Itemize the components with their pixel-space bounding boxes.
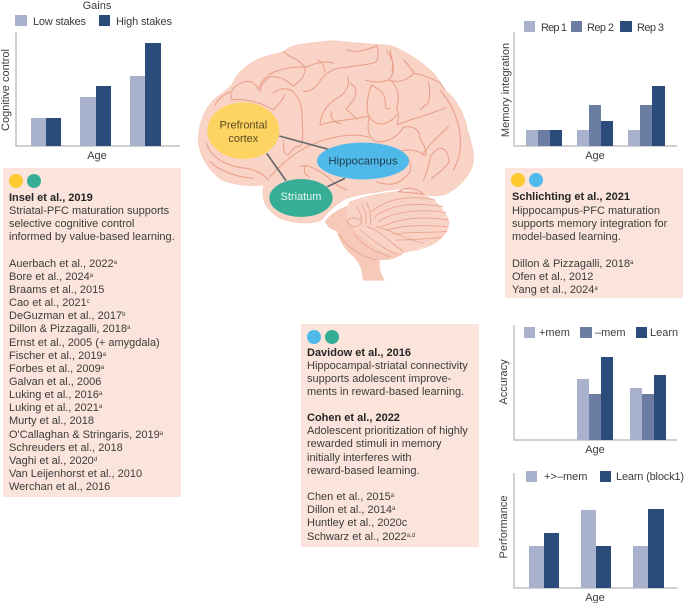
legend: performance: Learn (block1) (616, 471, 684, 483)
legend: repetitions: Rep 1 (541, 22, 567, 34)
chart: accuracy by age: Age (585, 444, 605, 456)
panel: Davidow and Cohen: initially interferes with (307, 452, 412, 464)
panel: Insel et al.: Braams et al., 2015 (9, 284, 104, 296)
region: hippocampus: Hippocampus (328, 155, 398, 167)
panel: Insel et al.: d (94, 457, 97, 463)
panel: Schlichting et al.: Yang et al., 2024 (512, 284, 594, 296)
bars: memory integration (526, 86, 665, 146)
brain illustration (198, 41, 473, 281)
panel: Insel et al.: a (99, 391, 103, 397)
panel: Schlichting et al.: Ofen et al., 2012 (512, 271, 593, 283)
panel: Schlichting et al. (505, 168, 683, 298)
panel: Insel et al.: Vaghi et al., 2020 (9, 455, 94, 467)
connection lines (267, 136, 345, 187)
panel: Davidow and Cohen: Huntley et al., 2020c (307, 517, 408, 529)
panel: Schlichting et al.: Hippocampus-PFC maturation (512, 205, 660, 217)
panel: Insel et al.: Galvan et al., 2006 (9, 376, 101, 388)
panel: Insel et al.: DeGuzman et al., 2017 (9, 310, 122, 322)
panel: Insel et al.: Cao et al., 2021 (9, 297, 87, 309)
panel: Insel et al.: Dillon & Pizzagalli, 2018 (9, 323, 127, 335)
panel: Insel et al.: Fischer et al., 2019 (9, 350, 103, 362)
brainstem and cerebellum (325, 191, 449, 281)
cerebrum (198, 41, 473, 223)
legend: repetitions (524, 21, 664, 34)
region: prefrontal cortex: cortex (228, 133, 259, 145)
panel: Insel et al.: a (127, 325, 131, 331)
bars: cognitive control (31, 43, 161, 146)
panel: Insel et al.: c (87, 299, 90, 305)
bars: accuracy (577, 357, 666, 440)
panel: Schlichting et al.: a (594, 286, 598, 292)
legend: performance: +>–mem (544, 471, 587, 483)
chart: performance by age (498, 471, 684, 603)
panel: Insel et al.: b (122, 312, 126, 318)
chart: cognitive control by age (0, 0, 180, 162)
panel: Insel et al.: a (103, 352, 107, 358)
legend: gains stakes: High stakes (116, 16, 172, 28)
chart: memory integration by age: Memory integration (500, 43, 512, 137)
panel: Davidow and Cohen (301, 324, 479, 547)
chart: accuracy by age (498, 325, 678, 456)
panel: Davidow and Cohen: a,d (407, 533, 415, 539)
panel: Insel et al.: informed by value-based learning. (9, 231, 175, 243)
region: striatum: Striatum (281, 191, 321, 203)
legend: repetitions: Rep 3 (637, 22, 664, 34)
panel: Insel et al.: a (114, 260, 118, 266)
legend: gains stakes (15, 0, 172, 28)
panel: Insel et al.: Insel et al., 2019 (9, 192, 93, 204)
panel: Davidow and Cohen: a (392, 506, 396, 512)
panel: Insel et al.: a (90, 273, 94, 279)
legend: memory and learning (524, 327, 678, 339)
chart: cognitive control by age: Age (87, 150, 107, 162)
legend: memory and learning: Learn (650, 327, 678, 339)
legend: repetitions: Rep 2 (587, 22, 614, 34)
panel: Davidow and Cohen: Hippocampal-striatal connectivity (307, 360, 468, 372)
panel: Davidow and Cohen: supports adolescent improve- (307, 373, 452, 385)
panel: Davidow and Cohen: Chen et al., 2015 (307, 491, 391, 503)
legend: gains stakes: Gains (83, 0, 112, 12)
chart: memory integration by age: Age (585, 150, 605, 162)
panel: Insel et al.: Bore et al., 2024 (9, 271, 90, 283)
bars: performance (529, 509, 664, 588)
region: hippocampus (317, 143, 409, 179)
panel: Davidow and Cohen: Cohen et al., 2022 (307, 412, 400, 424)
panel: Davidow and Cohen: reward-based learning. (307, 465, 420, 477)
chart: accuracy by age: Accuracy (498, 359, 510, 405)
sulci (231, 62, 334, 100)
panel: Schlichting et al.: Dillon & Pizzagalli, 2018 (512, 258, 630, 270)
panel: Insel et al.: Van Leijenhorst et al., 2010 (9, 468, 142, 480)
panel: Davidow and Cohen: a (391, 493, 395, 499)
legend: performance (526, 471, 684, 483)
panel: Insel et al.: Auerbach et al., 2022 (9, 258, 114, 270)
panel: Schlichting et al.: model-based learning. (512, 231, 621, 243)
panel: Insel et al.: Luking et al., 2021 (9, 402, 99, 414)
chart: performance by age: Performance (498, 496, 510, 558)
panel: Insel et al.: O'Callaghan & Stringaris, 2019 (9, 429, 160, 441)
panel: Schlichting et al.: Schlichting et al., 2021 (512, 191, 630, 203)
chart: cognitive control by age: Cognitive control (0, 49, 12, 131)
panel: Insel et al.: Striatal-PFC maturation supports (9, 205, 170, 217)
panel: Schlichting et al.: a (630, 260, 634, 266)
legend: memory and learning: +mem (539, 327, 570, 339)
region: striatum (269, 179, 333, 217)
panel: Insel et al.: Murty et al., 2018 (9, 415, 94, 427)
panel: Insel et al.: Luking et al., 2016 (9, 389, 99, 401)
panel: Insel et al.: a (101, 365, 105, 371)
panel: Schlichting et al.: supports memory integration for (512, 218, 668, 230)
panel: Davidow and Cohen: ments in reward-based learning. (307, 386, 464, 398)
region: prefrontal cortex (207, 102, 279, 159)
panel: Davidow and Cohen: Dillon et al., 2014 (307, 504, 392, 516)
panel: Davidow and Cohen: Adolescent prioritization of highly (307, 425, 468, 437)
panel: Insel et al.: Ernst et al., 2005 (+ amygdala) (9, 337, 160, 349)
chart: memory integration by age (500, 21, 677, 162)
panel: Insel et al.: selective cognitive control (9, 218, 134, 230)
panel: Insel et al.: Schreuders et al., 2018 (9, 442, 123, 454)
legend: gains stakes: Low stakes (33, 16, 86, 28)
panel: Insel et al.: a (99, 404, 103, 410)
panel: Davidow and Cohen: Davidow et al., 2016 (307, 347, 411, 359)
legend: memory and learning: –mem (595, 327, 626, 339)
panel: Davidow and Cohen: rewarded stimuli in memory (307, 438, 442, 450)
panel: Insel et al. (3, 168, 181, 497)
panel: Insel et al.: Werchan et al., 2016 (9, 481, 110, 493)
panel: Insel et al.: Forbes et al., 2009 (9, 363, 101, 375)
panel: Insel et al.: a (160, 431, 164, 437)
region: prefrontal cortex: Prefrontal (220, 120, 267, 132)
panel: Davidow and Cohen: Schwarz et al., 2022 (307, 531, 407, 543)
